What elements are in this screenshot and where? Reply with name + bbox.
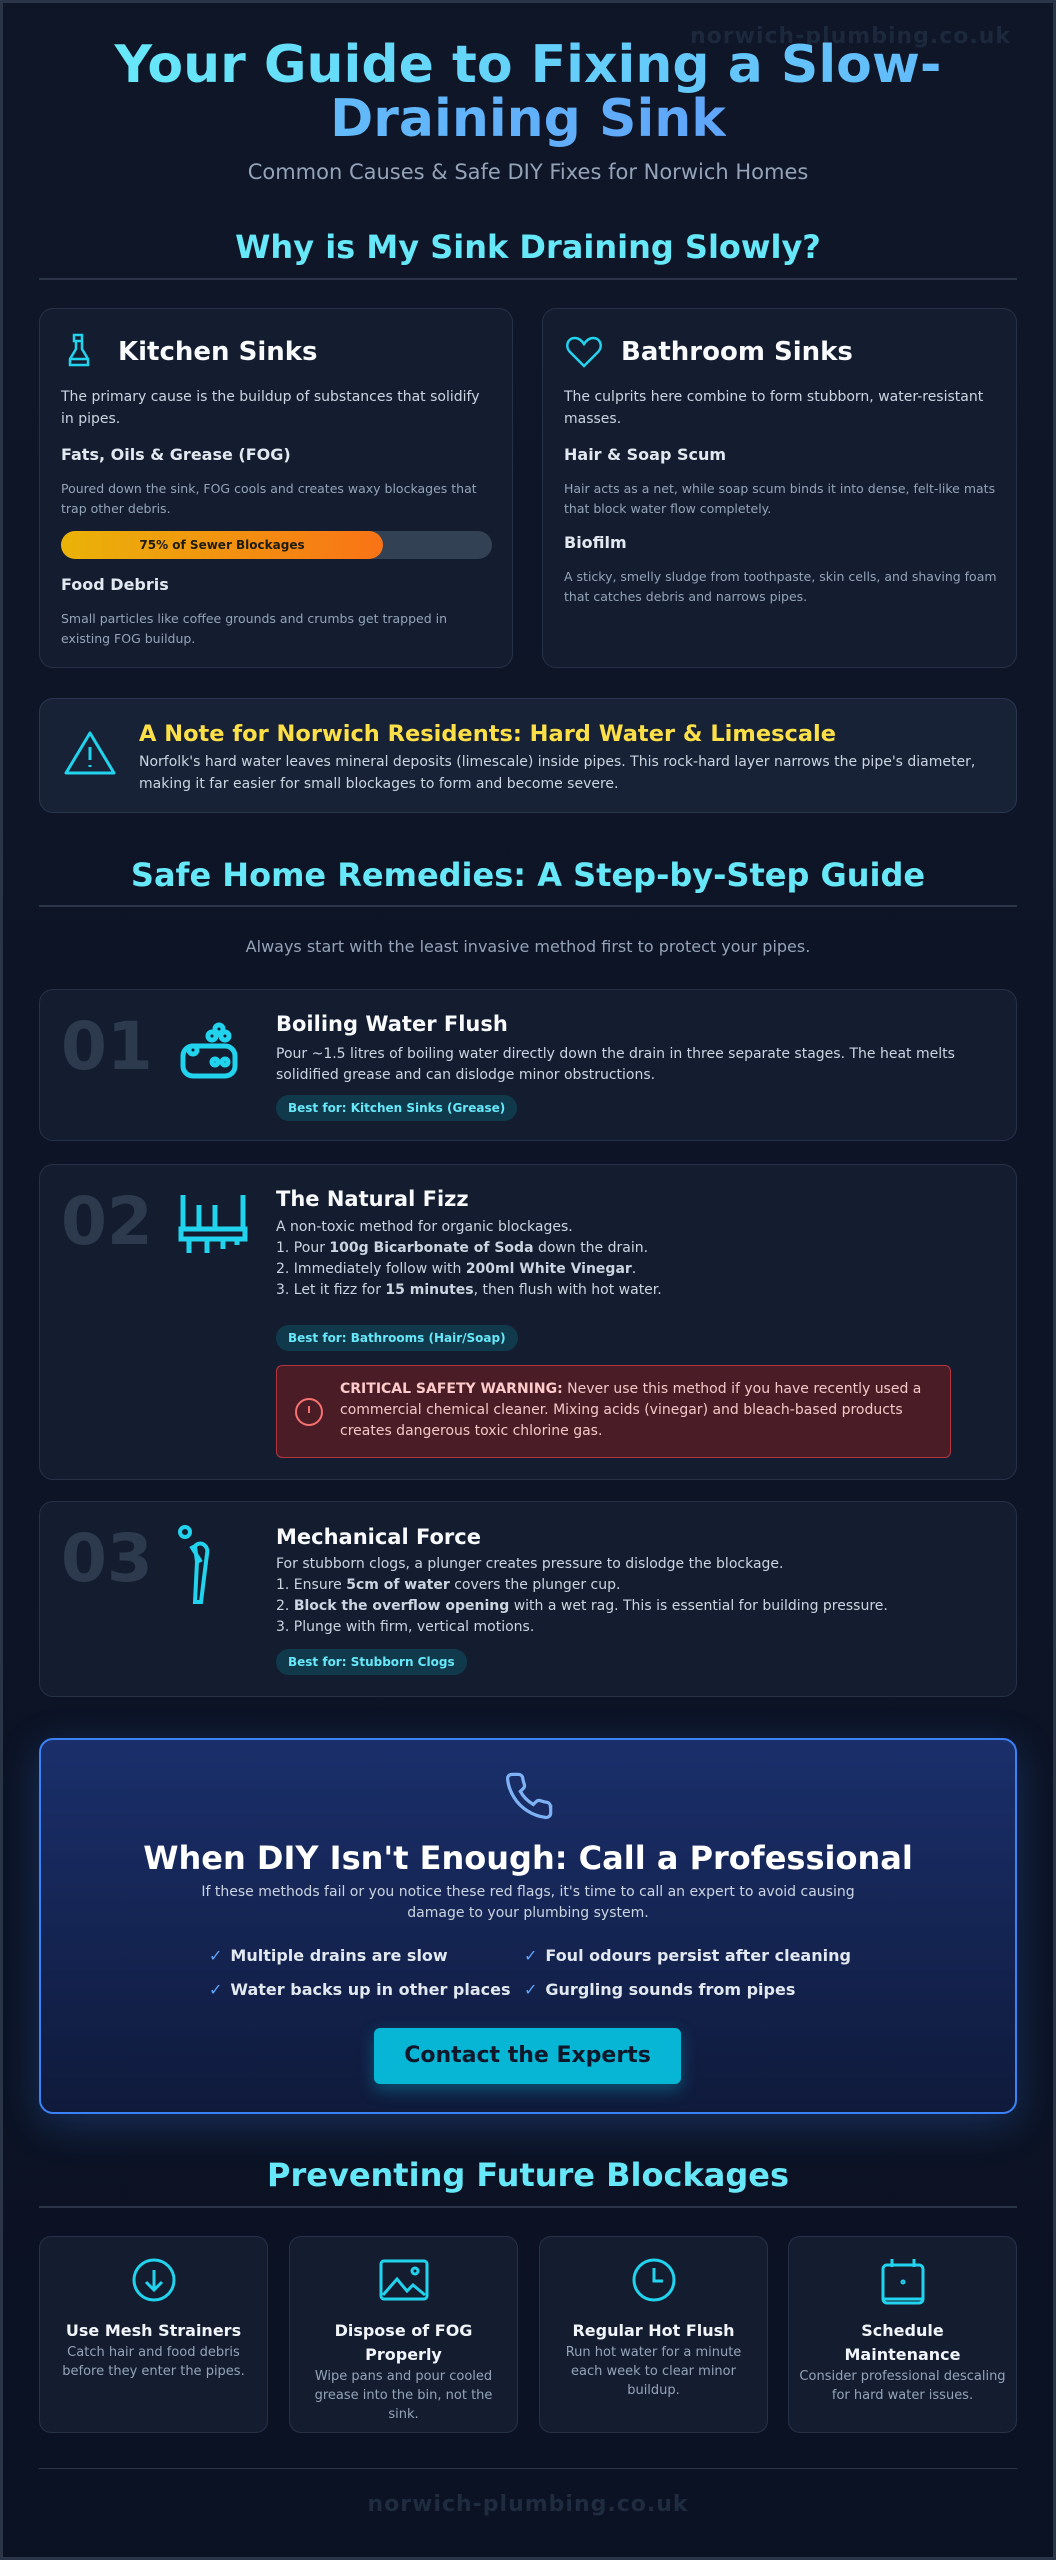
panel: maintenance: Schedule Maintenance <box>844 2321 960 2364</box>
icon: bubbles <box>180 1022 238 1078</box>
callout: safety warning: CRITICAL SAFETY WARNING: Never use this method if you have recently used a commercial chemical cleaner. Mixing acids (vinegar) and bleach-based products creates dangerous toxic chlorine gas. <box>340 1381 921 1439</box>
checklist: ✓ Foul odours persist after cleaning <box>524 1946 851 1965</box>
panel: step 1: Boiling Water Flush <box>276 1012 508 1036</box>
panel: mesh strainers: Catch hair and food debris before they enter the pipes. <box>62 2345 245 2379</box>
icon: clock <box>632 2258 676 2302</box>
callout: hard water note: A Note for Norwich Residents: Hard Water & Limescale <box>139 721 836 747</box>
panel: kitchen sinks: Kitchen Sinks <box>118 337 318 367</box>
icon: image <box>380 2260 428 2300</box>
panel: call a professional: When DIY Isn't Enough: Call a Professional <box>143 1839 913 1877</box>
panel: kitchen sinks: Food Debris <box>61 575 169 594</box>
heading: why: Why is My Sink Draining Slowly? <box>235 228 821 266</box>
panel: kitchen sinks: Fats, Oils & Grease (FOG) <box>61 445 291 464</box>
title <box>114 35 942 149</box>
panel: bathroom sinks: Hair & Soap Scum <box>564 445 726 464</box>
panel: bathroom sinks: A sticky, smelly sludge from toothpaste, skin cells, and shaving foam that catches debris and narrows pipes. <box>564 569 997 604</box>
panel: step 3 <box>39 1501 1017 1697</box>
panel: kitchen sinks: Poured down the sink, FOG cools and creates waxy blockages that trap other debris. <box>61 481 477 516</box>
icon: calendar <box>882 2259 924 2304</box>
panel: step 2: 3. Let it fizz for 15 minutes, then flush with hot water. <box>276 1282 662 1298</box>
panel: dispose FOG: Wipe pans and pour cooled grease into the bin, not the sink. <box>315 2369 492 2422</box>
icon: warning <box>64 731 116 774</box>
panel: step 2: Best for: Bathrooms (Hair/Soap) <box>288 1331 506 1345</box>
panel: kitchen sinks: The primary cause is the buildup of substances that solidify in pipes. <box>61 389 479 427</box>
panel: hot flush: Regular Hot Flush <box>572 2321 735 2340</box>
checklist: ✓ Water backs up in other places <box>209 1980 511 1999</box>
heading: remedies: Safe Home Remedies: A Step-by-Step Guide <box>131 856 925 894</box>
title: Your Guide to Fixing a Slow- <box>114 35 942 95</box>
panel: kitchen sinks <box>39 308 513 668</box>
panel: step 3: 1. Ensure 5cm of water covers the plunger cup. <box>276 1577 620 1593</box>
panel: step 1: Best for: Kitchen Sinks (Grease) <box>288 1101 505 1115</box>
panel: step 1 <box>39 989 1017 1141</box>
checklist: ✓ Gurgling sounds from pipes <box>524 1980 795 1999</box>
panel: bathroom sinks: Bathroom Sinks <box>621 337 853 367</box>
panel: bathroom sinks: Biofilm <box>564 533 627 552</box>
panel: dispose FOG <box>289 2236 518 2433</box>
panel: bathroom sinks: Hair acts as a net, while soap scum binds it into dense, felt-like mats that block water flow completely. <box>564 481 995 516</box>
panel: call a professional <box>39 1738 1017 2114</box>
callout: hard water note: Norfolk's hard water leaves mineral deposits (limescale) inside pipes. This rock-hard layer narrows the pipe's diameter, making it far easier for small blockages to form and become severe. <box>139 754 975 792</box>
panel: step 3: Best for: Stubborn Clogs <box>288 1655 455 1669</box>
panel: step 1: Pour ~1.5 litres of boiling water directly down the drain in three separate stages. The heat melts solidified grease and can dislodge minor obstructions. <box>276 1046 955 1083</box>
button: Contact the Experts <box>404 2043 651 2068</box>
panel: step 2: 02 <box>61 1183 153 1260</box>
panel: maintenance: Consider professional descaling for hard water issues. <box>799 2369 1006 2403</box>
subtitle: Common Causes & Safe DIY Fixes for Norwich Homes <box>248 160 808 184</box>
panel: dispose FOG: Dispose of FOG Properly <box>335 2321 472 2364</box>
panel: maintenance <box>788 2236 1017 2433</box>
title: Draining Sink <box>330 89 726 149</box>
icon: comb <box>178 1195 248 1253</box>
panel: step 3: 03 <box>61 1520 153 1597</box>
chart: progress bar: 75% of Sewer Blockages <box>139 538 305 552</box>
panel: kitchen sinks: Small particles like coffee grounds and crumbs get trapped in existing FOG buildup. <box>61 611 447 646</box>
panel: step 3: 3. Plunge with firm, vertical motions. <box>276 1619 534 1635</box>
panel: step 2 <box>39 1164 1017 1480</box>
icon: phone <box>506 1772 552 1820</box>
button <box>374 2028 681 2084</box>
panel: step 3: Mechanical Force <box>276 1525 481 1549</box>
panel: step 2: 2. Immediately follow with 200ml White Vinegar. <box>276 1261 636 1277</box>
panel: step 2: The Natural Fizz <box>276 1187 469 1211</box>
panel: mesh strainers: Use Mesh Strainers <box>66 2321 241 2340</box>
footer: norwich-plumbing.co.uk <box>367 2492 689 2517</box>
icon: plunger <box>178 1525 210 1604</box>
checklist: ✓ Multiple drains are slow <box>209 1946 448 1965</box>
icon: flask <box>68 334 90 366</box>
panel: bathroom sinks: The culprits here combine to form stubborn, water-resistant masses. <box>564 389 983 427</box>
checklist <box>209 1946 851 1999</box>
panel: step 2: 1. Pour 100g Bicarbonate of Soda down the drain. <box>276 1240 648 1256</box>
panel: hot flush <box>539 2236 768 2433</box>
panel: hot flush: Run hot water for a minute each week to clear minor buildup. <box>566 2345 741 2398</box>
panel: step 2: A non-toxic method for organic blockages. <box>276 1219 573 1235</box>
icon: alert <box>295 1398 323 1426</box>
watermark: norwich-plumbing.co.uk <box>690 24 1011 49</box>
panel: mesh strainers <box>39 2236 268 2433</box>
icon: heart <box>566 336 602 368</box>
callout: hard water note <box>39 698 1017 813</box>
panel: step 3: For stubborn clogs, a plunger creates pressure to dislodge the blockage. <box>276 1556 783 1572</box>
panel: step 1: 01 <box>61 1008 153 1085</box>
panel: call a professional: If these methods fail or you notice these red flags, it's time to call an expert to avoid causing damage to your plumbing system. <box>201 1884 855 1921</box>
panel: bathroom sinks <box>542 308 1017 668</box>
callout: safety warning <box>276 1365 951 1458</box>
panel: step 3: 2. Block the overflow opening with a wet rag. This is essential for building pressure. <box>276 1598 888 1614</box>
chart: progress bar <box>61 531 492 559</box>
icon: download circle <box>132 2258 176 2302</box>
heading: preventing: Preventing Future Blockages <box>267 2156 789 2194</box>
text: intro: Always start with the least invasive method first to protect your pipes. <box>246 937 810 956</box>
